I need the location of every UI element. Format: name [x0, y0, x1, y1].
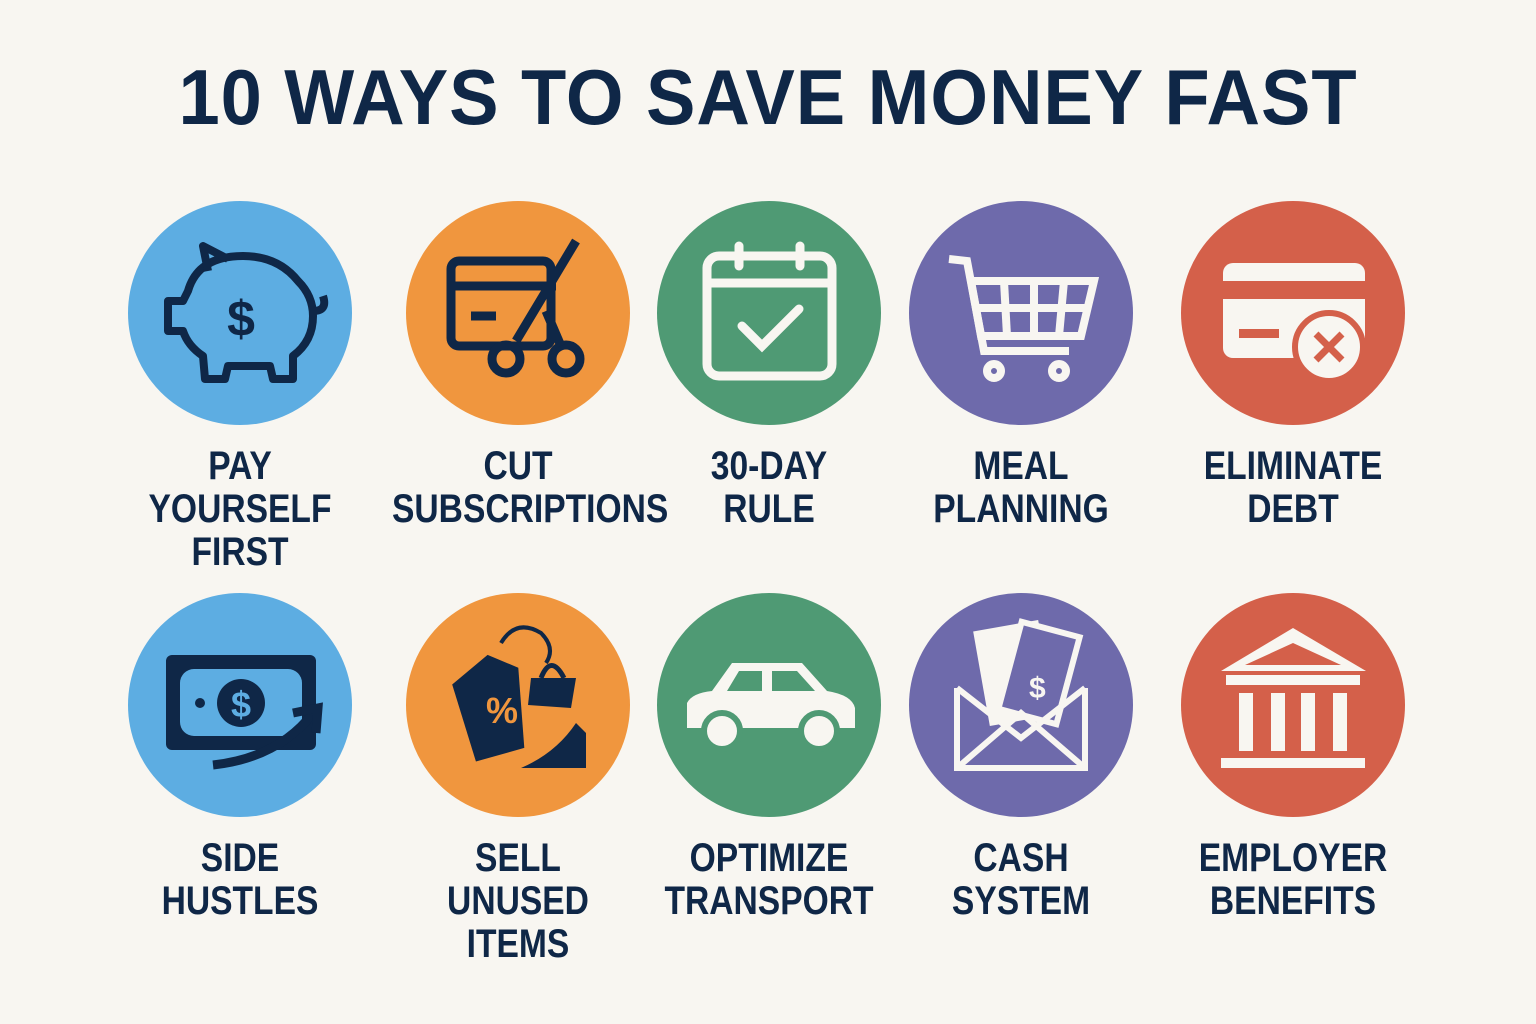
text: ELIMINATE	[1204, 444, 1382, 488]
text: 30-DAY	[711, 444, 827, 488]
item: meal planning	[909, 201, 1133, 531]
text: PAY	[208, 444, 272, 488]
text: SUBSCRIPTIONS	[392, 487, 668, 531]
text: SELL	[475, 836, 561, 880]
item: 30-day rule	[657, 201, 881, 531]
text: OPTIMIZE	[690, 836, 848, 880]
text: RULE	[723, 487, 815, 531]
item: pay yourself first	[128, 201, 352, 574]
text: UNUSED	[447, 879, 589, 923]
item: cut subscriptions	[392, 201, 668, 531]
text: ITEMS	[467, 922, 569, 966]
text: MEAL	[973, 444, 1069, 488]
text: YOURSELF	[149, 487, 331, 531]
text: HUSTLES	[162, 879, 318, 923]
text: SYSTEM	[952, 879, 1090, 923]
item: employer benefits	[1181, 593, 1405, 923]
text: $	[231, 684, 251, 725]
item: cash system	[909, 593, 1133, 923]
text: EMPLOYER	[1199, 836, 1387, 880]
text: FIRST	[191, 530, 289, 574]
text: TRANSPORT	[664, 879, 874, 923]
text: CUT	[483, 444, 553, 488]
text: %	[486, 690, 518, 731]
item: optimize transport	[657, 593, 881, 923]
title: 10 WAYS TO SAVE MONEY FAST	[178, 53, 1358, 141]
text: $	[227, 291, 255, 347]
text: PLANNING	[933, 487, 1109, 531]
item: side hustles	[128, 593, 352, 923]
text: CASH	[973, 836, 1069, 880]
item: eliminate debt	[1181, 201, 1405, 531]
text: SIDE	[201, 836, 279, 880]
item: sell unused items	[406, 593, 630, 966]
text: DEBT	[1247, 487, 1339, 531]
text: BENEFITS	[1210, 879, 1376, 923]
text: $	[1029, 672, 1046, 705]
